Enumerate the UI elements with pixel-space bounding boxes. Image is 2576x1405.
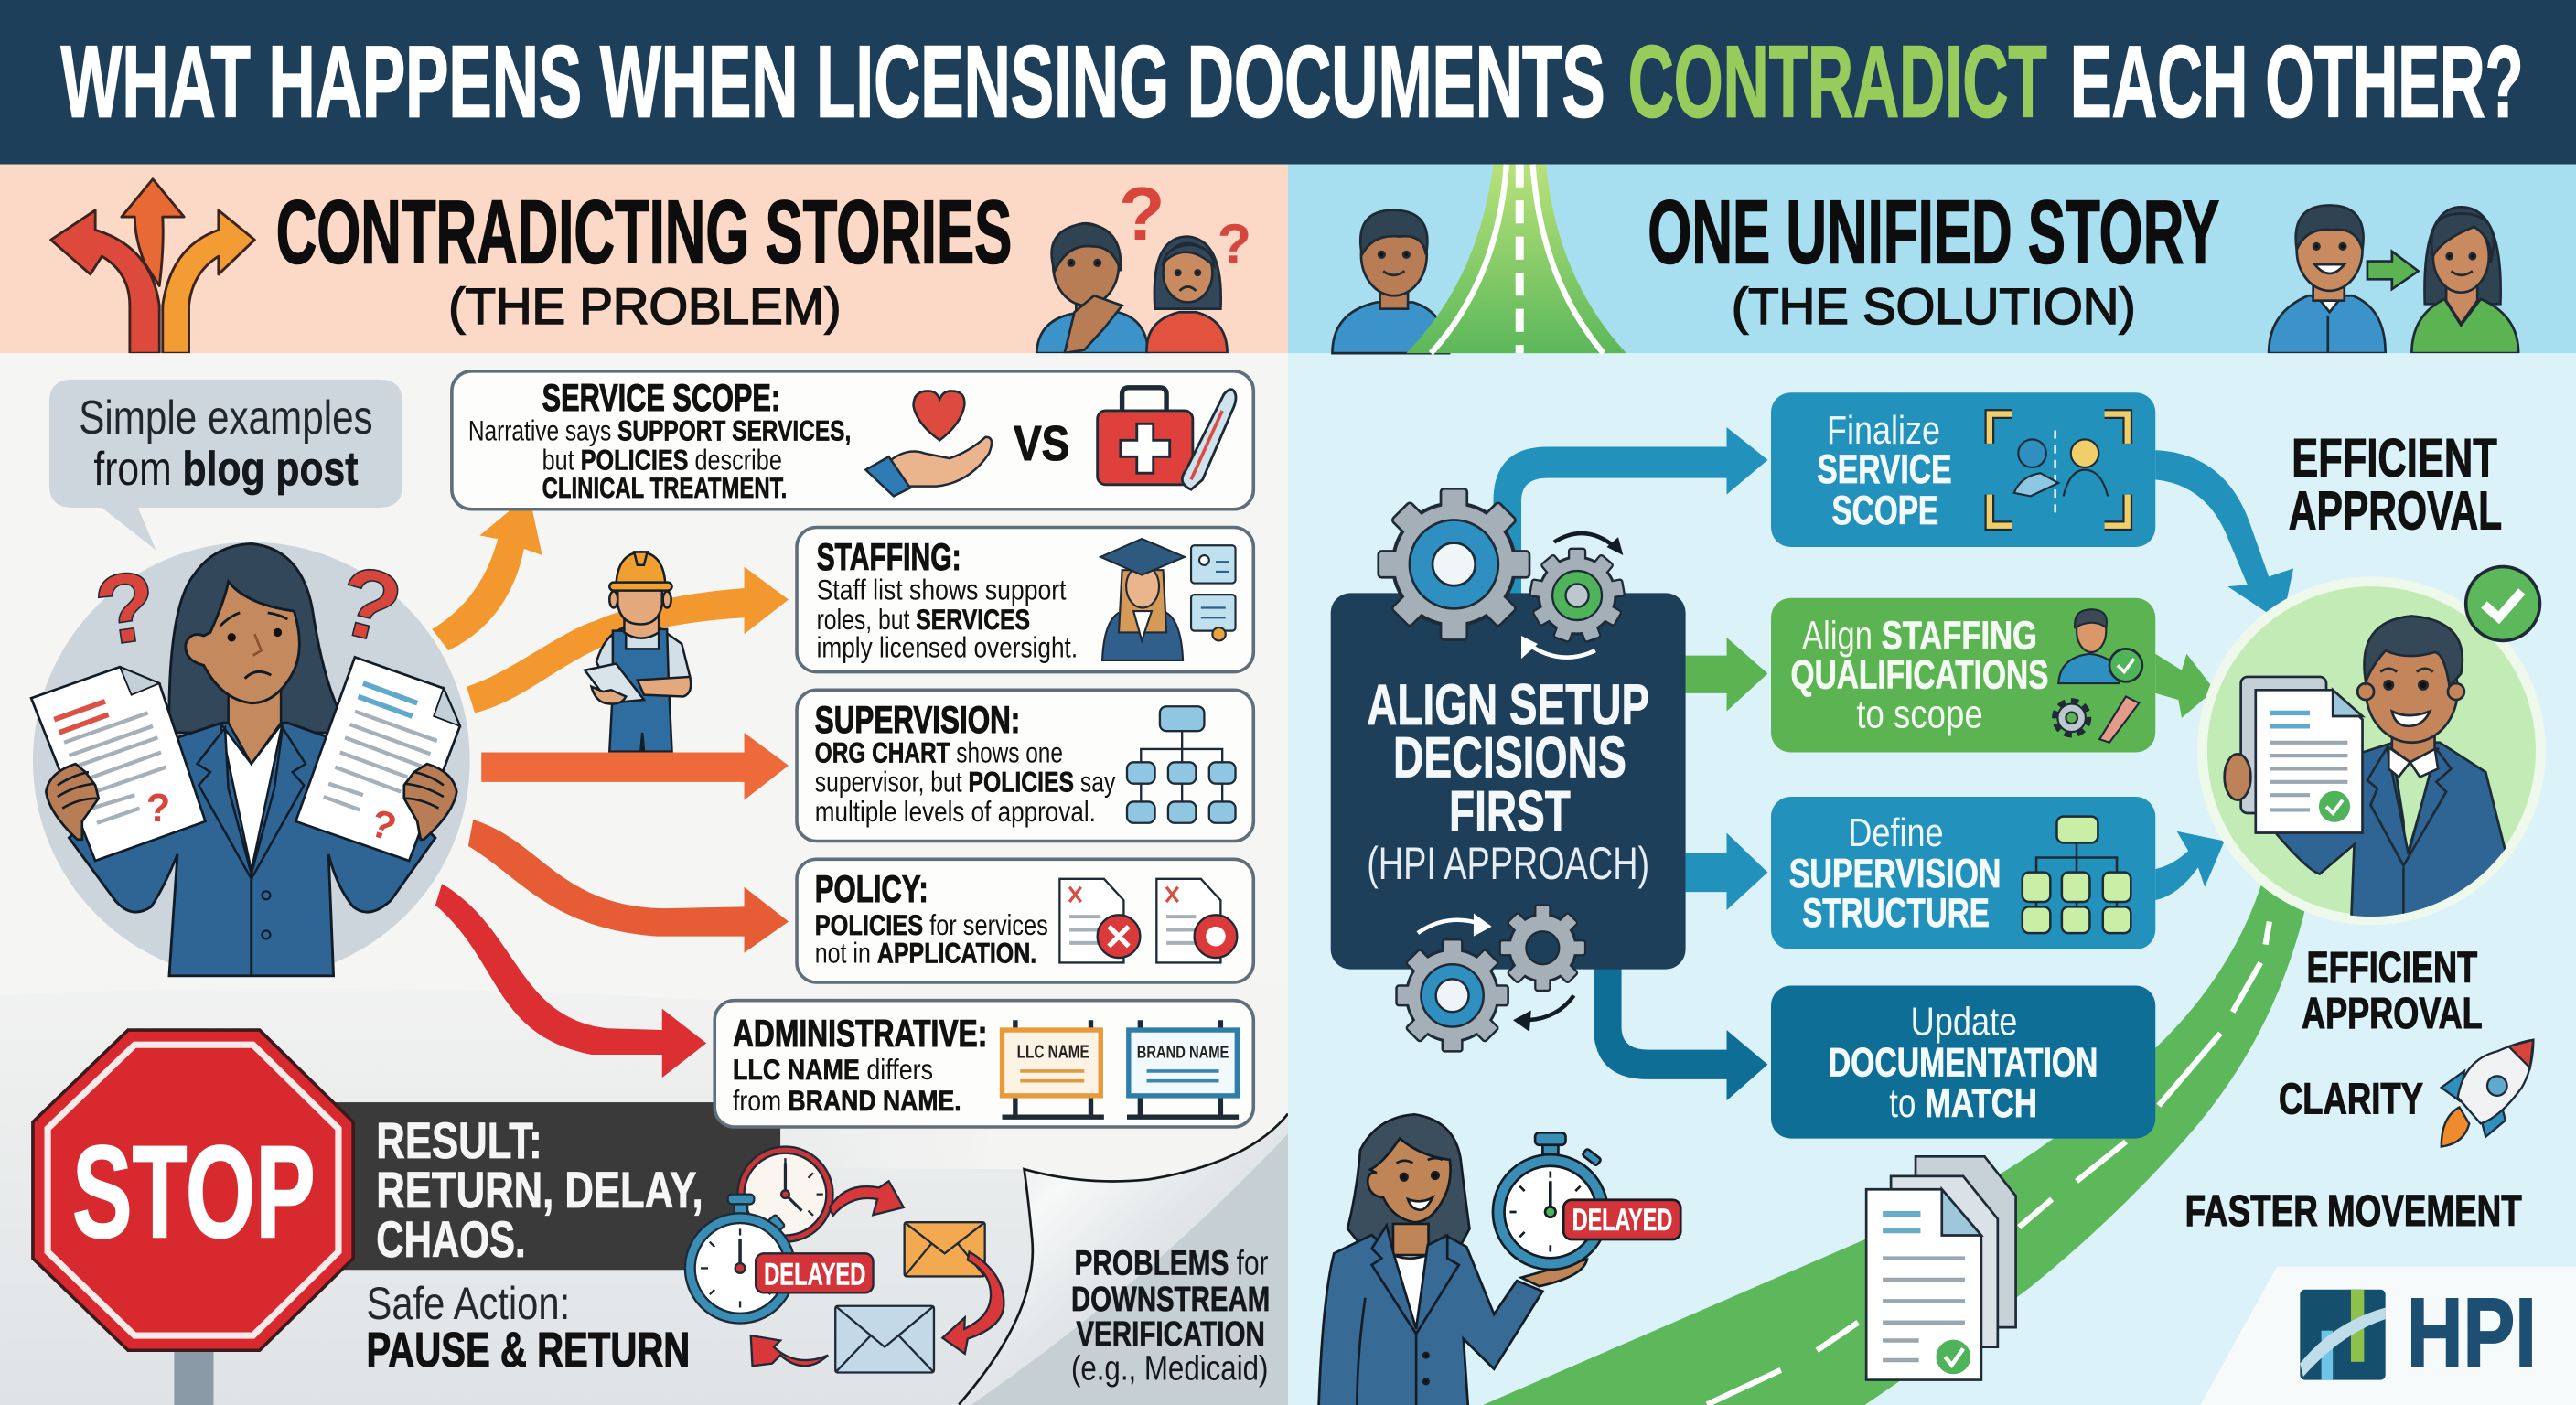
icon: org chart: [1127, 706, 1236, 823]
step: update documentation: [1771, 986, 2155, 1139]
heading band: the solution: ONE UNIFIED STORY: [1648, 181, 2219, 282]
icon: LLC sign: LLC NAME: [1017, 1042, 1089, 1063]
arrow: scope to approval: [2155, 450, 2293, 623]
label: efficient approval top: EFFICIENT: [2292, 427, 2497, 488]
label: efficient approval lower: APPROVAL: [2302, 989, 2483, 1038]
icon: road to horizon: [1406, 165, 1626, 353]
arrow: to define supervision: [1686, 833, 1767, 910]
card: service scope: SERVICE SCOPE:: [542, 377, 780, 419]
card: service scope: CLINICAL TREATMENT.: [542, 472, 787, 504]
step: align staffing qualifications: [1771, 598, 2155, 753]
heading band: the problem: CONTRADICTING STORIES: [276, 181, 1012, 282]
logo: HPI: HPI: [2407, 1277, 2537, 1388]
panel: align setup decisions: (HPI APPROACH): [1367, 837, 1649, 889]
jacket and arms: [69, 723, 435, 976]
card: administrative: ADMINISTRATIVE:: [733, 1013, 987, 1055]
arrow: to service scope: [432, 495, 542, 650]
panel: align setup decisions: [1331, 593, 1686, 970]
question marks: ?: [89, 549, 164, 667]
callout: simple examples from blog post: Simple examples: [79, 391, 373, 445]
icon: diverging arrows: [51, 179, 254, 353]
right document: [295, 657, 460, 861]
arrow: to policy: [468, 820, 789, 953]
icon: man passing to woman: [2269, 205, 2518, 353]
icon: rejected documents: [1059, 879, 1237, 962]
card: service scope: [452, 371, 1253, 509]
card: staffing: [797, 527, 1253, 672]
left document: [31, 667, 205, 861]
heading band: the solution: (THE SOLUTION): [1732, 278, 2136, 335]
icon: medical kit and thermometer: [1098, 388, 1236, 489]
card: staffing: Staff list shows support: [817, 574, 1067, 606]
card: administrative: LLC NAME differs: [733, 1054, 933, 1086]
card: service scope: Narrative says SUPPORT SERVICES,: [468, 414, 851, 446]
step: align staffing qualifications: QUALIFICATIONS: [1791, 650, 2049, 697]
result banner: RESULT:: [376, 1112, 542, 1169]
result banner: RETURN, DELAY,: [376, 1162, 703, 1218]
card: staffing: STAFFING:: [817, 536, 961, 578]
icon: confused man and woman: ?: [1218, 212, 1251, 274]
panel: align setup decisions: FIRST: [1449, 780, 1571, 844]
icon: brand sign: [1127, 1020, 1239, 1117]
result banner: [328, 1102, 780, 1270]
icon: scope brackets with people: [1990, 414, 2128, 526]
step: finalize service scope: [1771, 392, 2155, 547]
icon: green org chart: [2023, 817, 2131, 933]
illustration: woman holding stopwatch: [1319, 1114, 1680, 1405]
card: staffing: roles, but SERVICES: [817, 604, 1030, 636]
question marks: ?: [327, 543, 413, 665]
illustration: worker with clipboard: [585, 552, 691, 752]
safe action text: PAUSE & RETURN: [366, 1323, 690, 1378]
card: supervision: SUPERVISION:: [815, 699, 1020, 741]
icon: man beside road: [1332, 210, 1449, 353]
step: finalize service scope: SCOPE: [1831, 487, 1938, 533]
card: policy: POLICIES for services: [815, 909, 1048, 941]
hands: [46, 764, 456, 840]
step: define supervision structure: [1771, 797, 2155, 949]
safe action text: [366, 1277, 690, 1378]
card: administrative: [714, 1001, 1253, 1127]
step: update documentation: Update: [1911, 1000, 2017, 1044]
panel: unified story background: [1288, 353, 2576, 1405]
label: clarity: CLARITY: [2279, 1075, 2423, 1124]
downstream verification note: DOWNSTREAM: [1071, 1280, 1270, 1318]
title banner: CONTRADICT: [1628, 25, 2047, 139]
card: policy: not in APPLICATION.: [815, 937, 1036, 969]
callout: simple examples from blog post: from blog post: [93, 443, 359, 496]
panel: align setup decisions: DECISIONS: [1393, 725, 1626, 789]
card: policy: [797, 859, 1253, 982]
hair: [169, 543, 338, 733]
downstream verification note: (e.g., Medicaid): [1071, 1349, 1268, 1388]
step: finalize service scope: Finalize: [1827, 409, 1940, 453]
card: supervision: [797, 690, 1253, 842]
step: align staffing qualifications: Align STAFFING: [1802, 614, 2037, 658]
result banner: CHAOS.: [376, 1211, 526, 1268]
step: define supervision structure: SUPERVISION: [1789, 850, 2001, 896]
illustration: woman holding stopwatch: DELAYED: [1572, 1203, 1672, 1238]
icon: brand sign: BRAND NAME: [1137, 1043, 1229, 1062]
icon: graduate with credentials: [1100, 539, 1236, 660]
road to approval: [1480, 871, 2306, 1405]
icon: rocket: [2442, 1040, 2533, 1147]
title banner: [0, 0, 2576, 165]
icon: envelopes with return arrows: [751, 1181, 1004, 1372]
icon: confused man and woman: ?: [1119, 171, 1165, 256]
icon: gears top: [1379, 488, 1625, 659]
downstream verification note: [1071, 1244, 1270, 1388]
shirt: [220, 723, 283, 871]
card: supervision: supervisor, but POLICIES say: [815, 767, 1116, 799]
card: policy: POLICY:: [815, 868, 928, 910]
document held by man: [2225, 677, 2363, 833]
arrow: to finalize service scope: [1493, 427, 1767, 607]
card: administrative: from BRAND NAME.: [733, 1085, 961, 1117]
icon: LLC sign: [1003, 1020, 1104, 1117]
arrow: to align staffing: [1686, 638, 1767, 712]
panel: contradicting stories background: [0, 353, 1288, 1405]
stop sign: STOP: [72, 1119, 316, 1265]
arrow: staffing to approval: [2155, 654, 2215, 718]
step: finalize service scope: SERVICE: [1817, 445, 1952, 492]
icon: confused man and woman: [1036, 171, 1251, 353]
panel: align setup decisions: ALIGN SETUP: [1367, 673, 1649, 737]
icon: gears bottom: [1397, 906, 1585, 1051]
illustration: confused woman with two documents: [31, 542, 470, 979]
card: staffing: imply licensed oversight.: [817, 631, 1078, 663]
title banner: WHAT HAPPENS WHEN LICENSING DOCUMENTS: [60, 25, 1605, 139]
card: supervision: ORG CHART shows one: [815, 736, 1063, 768]
arrow: to supervision: [481, 733, 789, 800]
arrow: to administrative: [435, 884, 706, 1078]
card: service scope: VS: [1014, 416, 1069, 471]
illustration: approved man in green circle: [2202, 567, 2540, 937]
step: update documentation: to MATCH: [1889, 1079, 2037, 1126]
question marks: [89, 543, 413, 667]
step: define supervision structure: Define: [1848, 811, 1944, 855]
icon: check badge: [2466, 567, 2539, 640]
logo: HPI: [2200, 1267, 2576, 1405]
icon: clock and stopwatch delayed: [685, 1147, 874, 1324]
downstream verification note: PROBLEMS for: [1075, 1244, 1268, 1282]
arrow: to staffing: [467, 567, 789, 713]
icon: heart in hand: [865, 391, 992, 496]
card: supervision: multiple levels of approval.: [815, 796, 1096, 828]
step: update documentation: DOCUMENTATION: [1829, 1038, 2098, 1085]
callout: simple examples from blog post: [49, 380, 402, 551]
label: efficient approval top: [2289, 427, 2502, 541]
icon: qualified person with tools: [2056, 609, 2142, 743]
card: service scope: but POLICIES describe: [542, 445, 782, 477]
neck and face: [229, 690, 281, 764]
icon: document stack: [1866, 1156, 2016, 1380]
heading band: the problem: [0, 165, 1288, 353]
step: define supervision structure: STRUCTURE: [1802, 889, 1990, 936]
label: efficient approval lower: EFFICIENT: [2306, 943, 2478, 992]
label: efficient approval lower: [2302, 943, 2483, 1038]
left document: ?: [146, 787, 170, 831]
step: align staffing qualifications: to scope: [1856, 693, 1983, 737]
heading band: the problem: (THE PROBLEM): [448, 278, 842, 335]
arrow: to update documentation: [1594, 961, 1767, 1100]
safe action text: Safe Action:: [366, 1277, 570, 1329]
stop sign: [33, 1030, 353, 1405]
downstream verification note: VERIFICATION: [1076, 1314, 1265, 1353]
arrow: supervision to approval: [2155, 831, 2225, 900]
heading band: the solution: [1288, 165, 2576, 353]
right document: ?: [365, 801, 402, 851]
icon: clock and stopwatch delayed: DELAYED: [764, 1257, 865, 1292]
